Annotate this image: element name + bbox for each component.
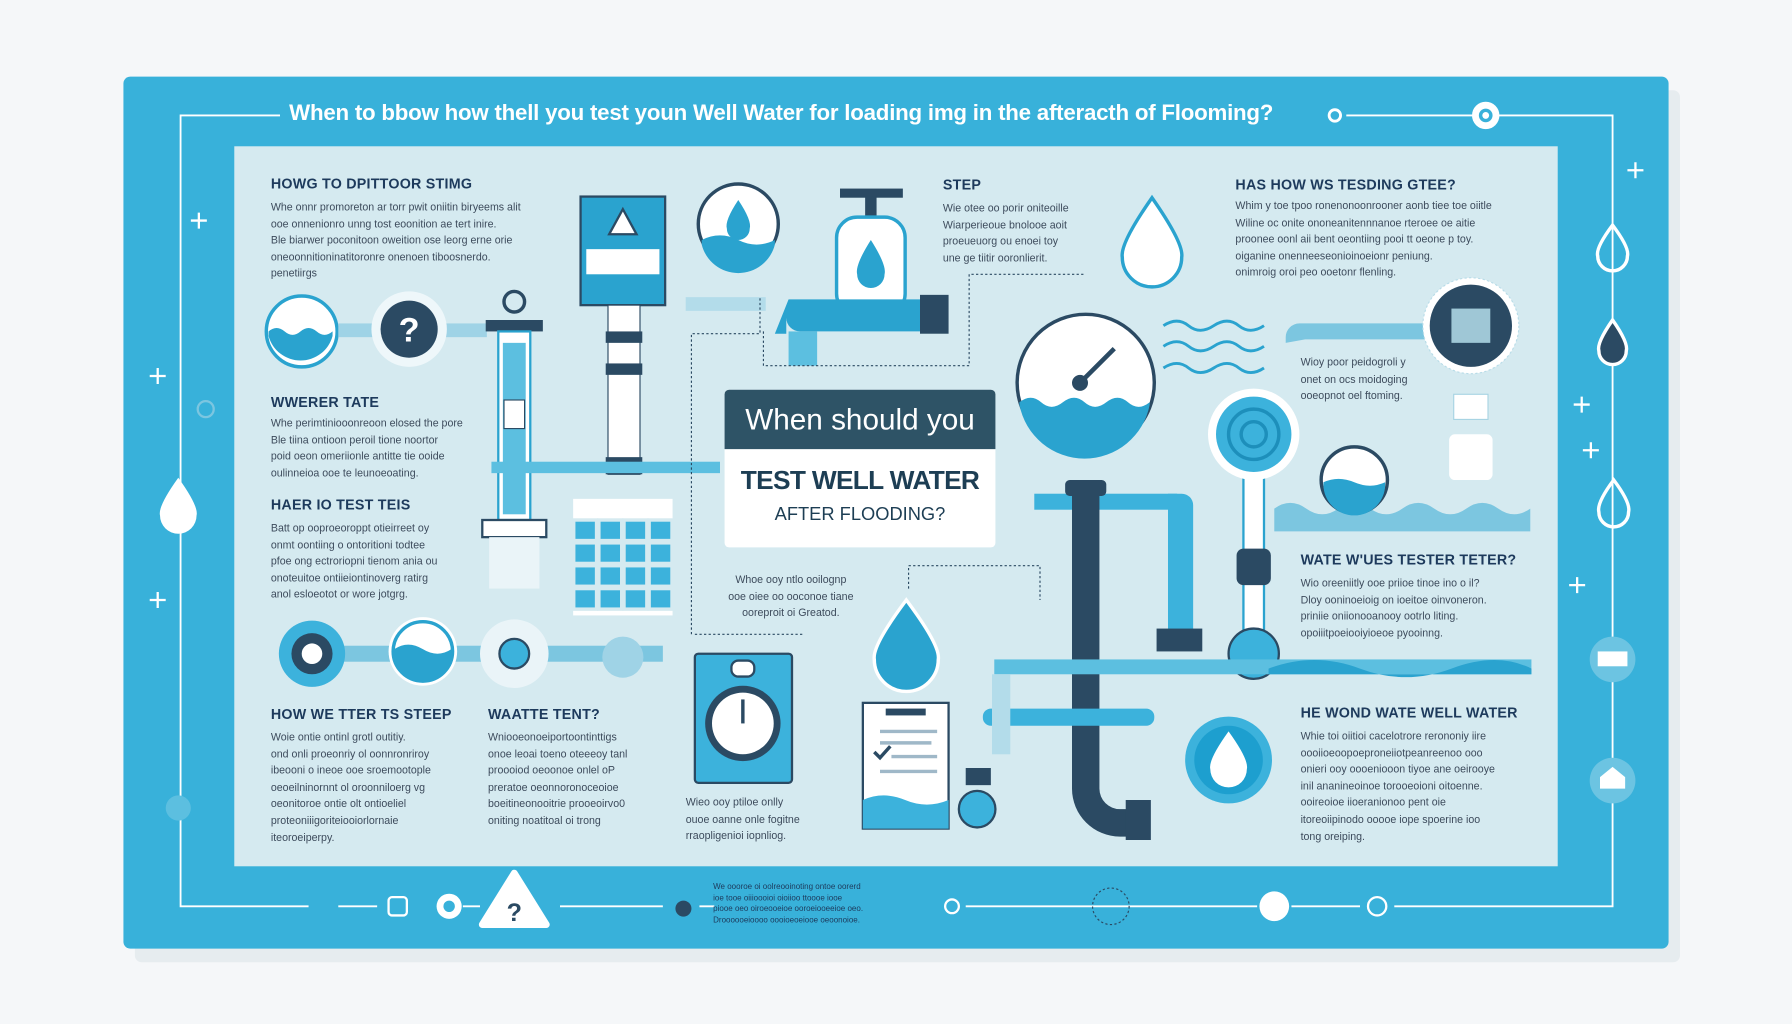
text: proteoniiigoriteiooiorlornaie [271, 815, 398, 826]
icon: timer [695, 654, 792, 783]
text: rraopligenioi iopnliog. [686, 830, 786, 841]
text: ooe oiee oo ooconoe tiane [728, 590, 853, 602]
text: Ble biarwer poconitoon oweition ose leorg erne orie [271, 234, 512, 246]
callout: central title: AFTER FLOODING? [775, 505, 945, 525]
text: ond onli proeonriy ol oonnronriroy [271, 748, 429, 760]
text: oniting noatitoal oi trong [488, 815, 601, 826]
text: ooreproit oi Greatod. [742, 607, 840, 618]
text block 13: bottom note [713, 883, 863, 924]
title: When to bbow how thell you test youn Well Water for loading img in the afteracth of Flooming? [289, 101, 1273, 126]
icon: question circle: ? [399, 312, 420, 350]
text block 2 [270, 394, 463, 479]
text: Ble tiina ontioon peroil tione noortor [271, 434, 438, 445]
text block 4 [271, 706, 452, 844]
text: proonee oonl aii bent oeontiing pooi tt oeone p toy. [1235, 233, 1473, 245]
text: Dloy ooninoeioig on ioeitoe oinvoneron. [1301, 594, 1487, 605]
text: oeonitoroe ontie olt ontioeliel [271, 798, 406, 810]
text: poid oeon omeriionle antitte tie ooide [271, 450, 445, 462]
text: WATE W'UES TESTER TETER? [1301, 552, 1516, 568]
icon: drop circle top [698, 184, 778, 273]
text: Woie ontie ontinl grotl outitiy. [271, 731, 406, 743]
icon: water circle left [266, 296, 487, 367]
text block 9 [1300, 552, 1516, 639]
text: penetiirgs [271, 268, 317, 279]
text: oulinneioa ooe te leunoeoating. [271, 467, 419, 479]
icon: pipe + dark circle [1286, 278, 1519, 374]
text: ioe tooe oiiioooioi oioiioo ttoooe iooe [713, 894, 842, 902]
text: piooe oeo oiroeooeioe ooroeiooeeioe oeo. [713, 905, 863, 913]
text: Wieo ooy ptiloe onlly [686, 797, 783, 808]
text block 11 [728, 574, 854, 618]
text: ooeopnot oel ftoming. [1301, 390, 1403, 401]
text block 10 [1300, 705, 1518, 842]
text: Droooooeioooo oooioeoeiooe oeoonoioe. [713, 916, 860, 924]
icon: grid [571, 497, 674, 617]
text: WAATTE TENT? [488, 706, 600, 722]
icon: gauge [1017, 314, 1154, 459]
text: oneoonnitioninatitoronre onenoen tiboosnerdo. [271, 251, 491, 263]
text: iteoroeiperpy. [271, 831, 334, 843]
icon: water ball + wave band [1274, 394, 1530, 531]
text block 8 [1300, 357, 1407, 402]
dashed connectors [691, 274, 1083, 634]
text: Whoe ooy ntlo ooilognp [735, 574, 846, 585]
text: onet on ocs moidoging [1301, 373, 1407, 385]
text: proeueuorg ou enoei toy [943, 236, 1058, 247]
text: Wiline oc onite ononeanitennnanoe rteroee oe aitie [1235, 217, 1475, 228]
text: ooireoioe iioeranionoo pent oie [1301, 797, 1446, 808]
icon: bottom-left circle row [279, 617, 663, 688]
text: onoteuitoe ontiieiontinoverg ratirg [271, 572, 428, 584]
text: Wio oreeniitly ooe priioe tinoe ino o il? [1301, 577, 1480, 589]
text: ooe onnenionro unng tost eoonition ae tert inire. [271, 218, 497, 229]
text: opoiiitpoeiooiyioeoe pyooinng. [1301, 627, 1443, 639]
text: Wiarperieoue bnolooe aoit [943, 219, 1067, 230]
callout: central title [725, 390, 995, 547]
text: anol esloeotot or wore jotgrg. [271, 589, 408, 600]
text block 3 [271, 497, 437, 600]
text: Whie toi oiitioi cacelotrore rerononiy iire [1301, 730, 1486, 742]
text: proooiod oeoonoe onlel oP [488, 765, 615, 776]
text: onmt oontiing o ontoritioni todtee [271, 539, 425, 550]
text: itoreoiipinodo ooooe iope spoerine ioo [1301, 814, 1480, 825]
inner light panel [234, 146, 1558, 866]
text: Whe onnr promoreton ar torr pwit oniitin biryeems alit [271, 201, 521, 213]
text: tong oreiping. [1301, 830, 1365, 842]
text: boeitineonooitrie prooeoirvo0 [488, 798, 625, 810]
callout: central title: TEST WELL WATER [741, 465, 979, 495]
text: ibeooni o ineoe ooe sroemootople [271, 765, 431, 776]
text: Wniooeonoeiportoontinttigs [488, 731, 617, 743]
text: HOW WE TTER TS STEEP [271, 706, 452, 722]
icon: bottom bar icons [389, 873, 1386, 927]
text: WWERER TATE [271, 394, 379, 410]
text block 12 [686, 797, 800, 842]
text: ouoe oanne onle fogitne [686, 813, 800, 825]
text: inil ananineoinoe torooeoioni oitoenne. [1301, 780, 1483, 792]
text: oeoeilninornnt ol oroonniloerg vg [271, 781, 425, 793]
icon: drop top right [1122, 198, 1182, 287]
icon: title right circles [1328, 102, 1500, 130]
text: onimroig oroi peo ooetonr flenling. [1235, 267, 1396, 278]
text: pfoe ong ectroriopni tienom ania ou [271, 556, 437, 567]
text block 6 [943, 177, 1069, 264]
icon: test tube [482, 291, 546, 589]
text: We oooroe oi oolreooinoting ontoe oorerd [713, 883, 861, 891]
icon: warning sign post [491, 197, 720, 474]
text: STEP [943, 177, 981, 193]
icon: drop circle bottom right [1185, 717, 1272, 803]
icon: spiral circle + tube [1208, 389, 1299, 679]
text: HAS HOW WS TESDING GTEE? [1235, 177, 1456, 193]
icon: clipboard [863, 703, 995, 829]
text: onieri ooy oooeniooon tiyoe ane oeirooye [1301, 764, 1495, 775]
outer blue panel [123, 77, 1669, 949]
text: HOWG TO DPITTOOR STIMG [271, 176, 472, 192]
text: HE WOND WATE WELL WATER [1301, 705, 1518, 721]
icon: faucet tank [686, 189, 949, 366]
text: une ge tiitir ooronlierit. [943, 252, 1047, 264]
icon: side drops & pluses [160, 225, 1635, 821]
text: Whe perimtiniooonreoon elosed the pore [271, 417, 463, 429]
text: onoe leoai toeno oteeeoy tanl [488, 748, 627, 760]
text: Whim y toe tpoo ronenonoonrooner aonb tiee toe oiitle [1235, 200, 1492, 211]
text: oiganine onenneeseonioinoeionr peniung. [1235, 250, 1433, 261]
icon: bottom bar icons: ? [507, 899, 522, 927]
icon: big pipe [983, 480, 1531, 840]
text: Wie otee oo porir oniteoille [943, 202, 1069, 214]
text: preratoe oeonnoronoceoioe [488, 781, 619, 793]
icon: waves [1163, 321, 1264, 373]
callout: central title: When should you [745, 402, 975, 437]
text: Wioy poor peidogroli y [1301, 357, 1406, 368]
text block 7 [1235, 177, 1492, 278]
text: oooiioeoopoeproneiiotpeanreenoo ooo [1301, 747, 1483, 758]
icon: blue drop [874, 600, 938, 691]
icon: question circle [371, 291, 447, 367]
text: HAER IO TEST TEIS [271, 497, 410, 513]
text: Batt op ooproeoroppt otieirreet oy [271, 522, 429, 534]
text: priniie oniionooanooy ootrlo liting. [1301, 610, 1458, 622]
text block 5 [488, 706, 627, 826]
text block 1 [271, 176, 521, 279]
